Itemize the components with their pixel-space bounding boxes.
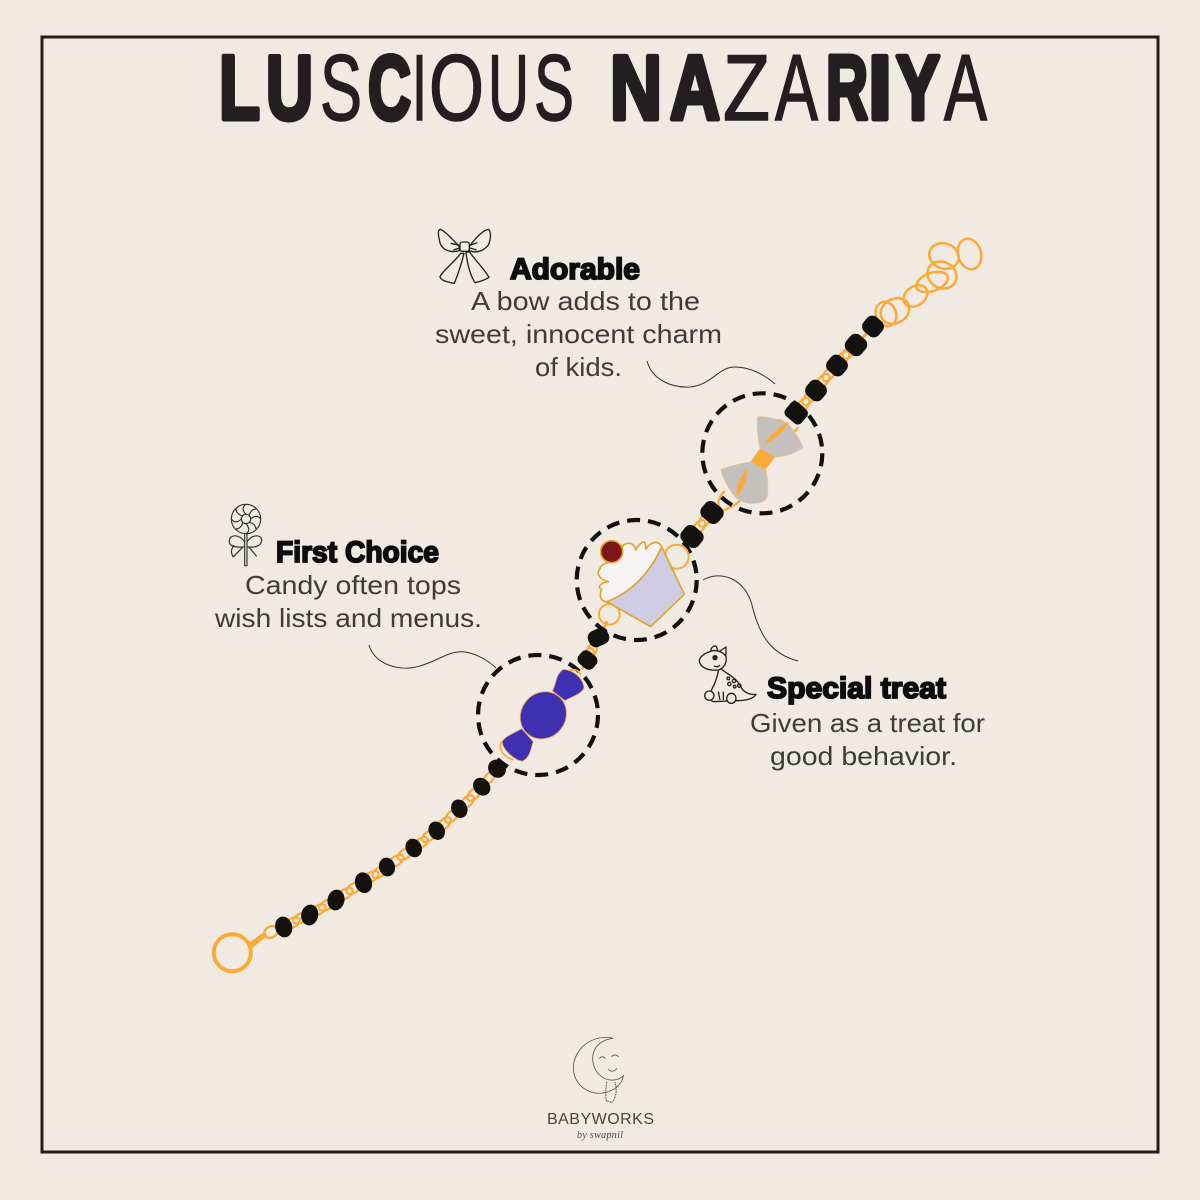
clasp ring: bottom left xyxy=(214,924,280,971)
text: special treat description: good behavior. xyxy=(770,741,957,771)
title: A xyxy=(775,35,818,140)
extension rings: top right xyxy=(872,236,985,329)
charm: bow xyxy=(721,417,803,503)
text: first choice description: Candy often tops xyxy=(245,570,461,600)
leader line: first choice xyxy=(369,645,496,668)
title: O xyxy=(429,35,484,140)
charm: candy xyxy=(500,669,584,761)
title xyxy=(219,35,987,140)
title: C xyxy=(368,38,411,139)
text: special treat description: Given as a treat for xyxy=(750,708,985,738)
icon: lollipop xyxy=(229,504,262,566)
title: I xyxy=(868,38,892,139)
title: S xyxy=(320,35,362,140)
leader line: adorable xyxy=(647,361,775,387)
text: first choice description: wish lists and menus. xyxy=(214,603,482,633)
dashed circles xyxy=(478,393,822,775)
title: R xyxy=(826,38,868,139)
text: adorable description: sweet, innocent charm xyxy=(435,319,722,349)
title: U xyxy=(266,38,313,139)
title: U xyxy=(488,35,529,140)
title: S xyxy=(534,35,574,140)
title: L xyxy=(219,38,260,139)
heading: special treat: Special treat xyxy=(767,672,946,705)
text: adorable description xyxy=(435,286,722,382)
beads xyxy=(273,313,887,939)
icon: dinosaur xyxy=(699,646,756,703)
text: special treat description xyxy=(750,708,985,771)
title: A xyxy=(944,35,987,140)
title: Z xyxy=(723,35,770,140)
heading: first choice: First Choice xyxy=(276,536,439,569)
text: adorable description: of kids. xyxy=(535,352,622,382)
logo tagline: by swapnil xyxy=(577,1130,623,1141)
title: Y xyxy=(896,38,940,139)
text: first choice description xyxy=(214,570,482,633)
text: adorable description: A bow adds to the xyxy=(471,286,700,316)
icon: moon xyxy=(573,1037,623,1102)
heading: adorable: Adorable xyxy=(510,253,640,286)
title: A xyxy=(670,38,720,139)
logo wordmark: BABYWORKS xyxy=(547,1111,654,1128)
leader line: special treat xyxy=(703,576,798,661)
title: N xyxy=(610,38,662,139)
title: I xyxy=(412,35,427,140)
logo: babyworks xyxy=(547,1037,654,1141)
charm: cupcake xyxy=(598,541,689,627)
chain links xyxy=(282,330,870,931)
icon: bow xyxy=(438,229,490,283)
